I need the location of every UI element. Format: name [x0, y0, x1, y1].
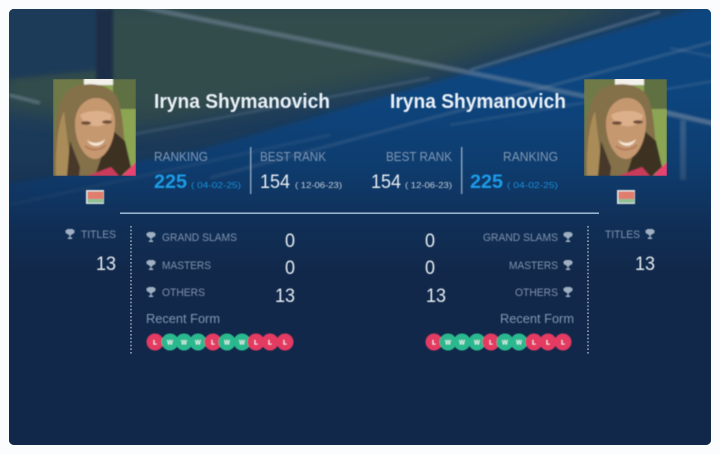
left recent form badges: L [153, 340, 157, 346]
right name: Iryna Shymanovich [390, 91, 566, 113]
right ranking value: 225 [470, 172, 503, 193]
right flag: Belarus [617, 190, 635, 204]
right titles column [605, 229, 655, 275]
left recent form badges: L [211, 340, 215, 346]
right best rank label: BEST RANK [386, 149, 452, 164]
grand slams icon [146, 232, 156, 242]
others value: 13 [426, 286, 446, 307]
left best rank value: 154 [260, 172, 290, 193]
right recent form badges: L [561, 340, 565, 346]
right stats [425, 231, 574, 326]
left best rank label: BEST RANK [260, 149, 326, 164]
masters icon [146, 260, 156, 270]
right divider [461, 147, 462, 194]
recent form label: Recent Form [500, 311, 574, 326]
titles value: 13 [96, 254, 116, 275]
grand slams label: GRAND SLAMS [483, 232, 558, 244]
masters icon [564, 260, 572, 270]
left flag: Belarus [86, 190, 104, 204]
right ranking date: ( 04-02-25) [507, 180, 558, 190]
recent form label: Recent Form [146, 311, 220, 326]
masters label: MASTERS [162, 260, 211, 272]
left player header [154, 91, 342, 194]
left recent form badges: W [167, 340, 173, 346]
left divider [250, 147, 251, 194]
left recent form badges: W [195, 340, 201, 346]
masters value: 0 [285, 258, 295, 279]
right player header [371, 91, 566, 194]
right recent form badges: W [445, 340, 451, 346]
right recent form badges: L [489, 340, 493, 346]
left best rank date: ( 12-06-23) [295, 180, 342, 190]
left recent form badges: W [239, 340, 245, 346]
others icon [146, 287, 156, 297]
grand slams value: 0 [425, 231, 435, 252]
others label: OTHERS [515, 287, 558, 299]
grand slams icon [564, 232, 572, 242]
masters value: 0 [425, 258, 435, 279]
left recent form badges: L [283, 340, 287, 346]
left recent form badges: L [254, 340, 258, 346]
others label: OTHERS [162, 287, 205, 299]
left recent form badges [146, 334, 294, 350]
trophy icon [66, 229, 74, 239]
grand slams label: GRAND SLAMS [162, 232, 237, 244]
left dotted divider [130, 226, 132, 354]
grand slams value: 0 [285, 231, 295, 252]
trophy icon [646, 229, 654, 239]
right recent form badges [426, 334, 572, 350]
right dotted divider [587, 226, 589, 354]
left titles column [66, 229, 116, 275]
right recent form badges: W [516, 340, 522, 346]
right best rank value: 154 [371, 172, 401, 193]
left stats [146, 231, 295, 326]
right recent form badges: L [432, 340, 436, 346]
left name: Iryna Shymanovich [154, 91, 330, 113]
left recent form badges: W [224, 340, 230, 346]
masters label: MASTERS [509, 260, 558, 272]
left ranking date: ( 04-02-25) [191, 180, 241, 190]
right recent form badges: W [459, 340, 465, 346]
right ranking label: RANKING [503, 149, 558, 164]
others icon [564, 287, 572, 297]
titles label: TITLES [81, 229, 116, 241]
left ranking value: 225 [154, 172, 187, 193]
left recent form badges: W [181, 340, 187, 346]
right recent form badges: L [532, 340, 536, 346]
right player portrait [584, 76, 667, 176]
right best rank date: ( 12-06-23) [405, 180, 452, 190]
header rule [120, 212, 599, 214]
left player portrait [53, 76, 136, 176]
left ranking label: RANKING [154, 149, 208, 164]
titles label: TITLES [605, 229, 640, 241]
right recent form badges: W [474, 340, 480, 346]
left recent form badges: L [268, 340, 272, 346]
right recent form badges: L [546, 340, 550, 346]
right recent form badges: W [502, 340, 508, 346]
others value: 13 [275, 286, 295, 307]
titles value: 13 [635, 254, 655, 275]
